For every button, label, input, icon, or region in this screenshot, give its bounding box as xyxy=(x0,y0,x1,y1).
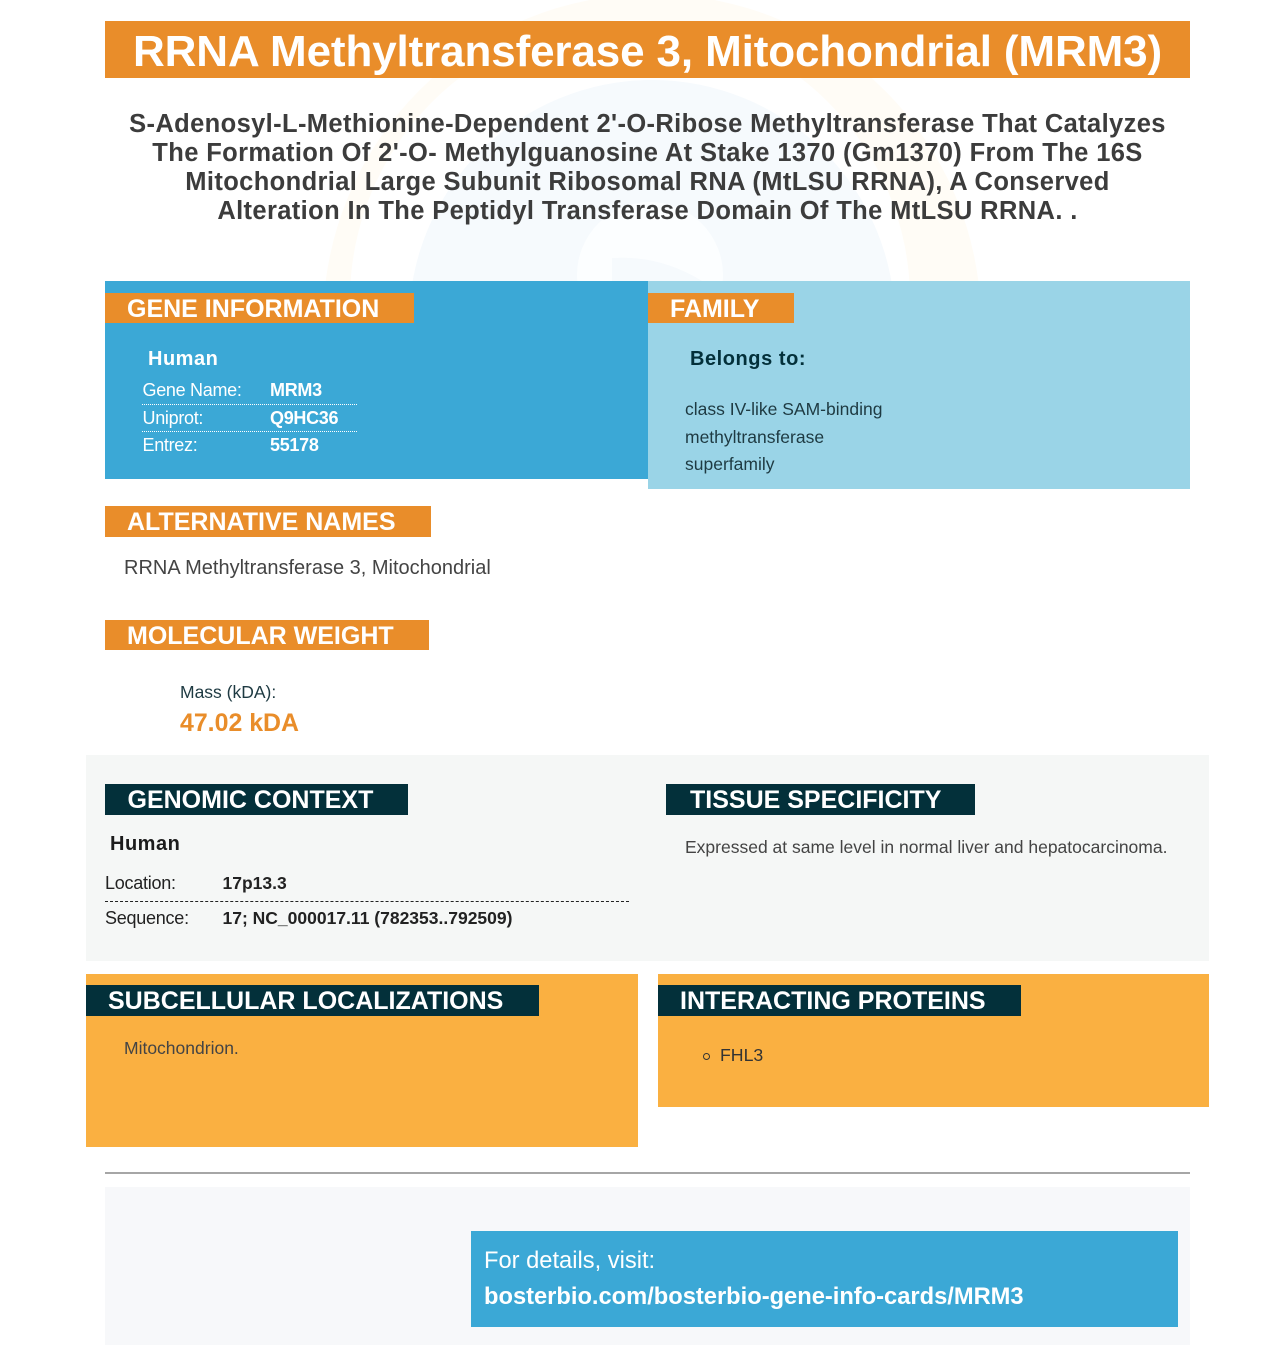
heading: interacting proteins: INTERACTING PROTEINS xyxy=(680,987,986,1015)
gene info table: MRM3 xyxy=(270,380,322,400)
species label: Human xyxy=(148,348,218,370)
title: RRNA Methyltransferase 3, Mitochondrial (MRM3) xyxy=(133,27,1162,76)
gene info table: Uniprot: xyxy=(142,408,203,428)
panel: family xyxy=(648,281,1190,489)
heading: genomic context: GENOMIC CONTEXT xyxy=(128,786,373,814)
subtitle description: The Formation Of 2'-O- Methylguanosine At Stake 1370 (Gm1370) From The 16S xyxy=(152,139,1143,167)
gene info table xyxy=(142,380,357,455)
species label: Human xyxy=(110,833,180,855)
protein name: FHL3 xyxy=(720,1045,763,1065)
callout label: For details, visit: xyxy=(484,1248,655,1274)
heading: tissue specificity: TISSUE SPECIFICITY xyxy=(690,786,941,814)
gene info table: Entrez: xyxy=(142,435,197,455)
family text xyxy=(685,399,882,474)
genomic table xyxy=(105,873,629,928)
localization text: Mitochondrion. xyxy=(124,1038,239,1058)
belongs to label: Belongs to: xyxy=(690,348,806,370)
gene info table: Q9HC36 xyxy=(270,408,338,428)
alternative names text: RRNA Methyltransferase 3, Mitochondrial xyxy=(124,557,491,579)
title banner xyxy=(105,21,1190,78)
callout: details link xyxy=(471,1231,1178,1327)
panel: genomic context and tissue specificity xyxy=(86,755,1209,961)
tissue specificity text: Expressed at same level in normal liver and hepatocarcinoma. xyxy=(685,837,1167,857)
heading: family: FAMILY xyxy=(670,295,759,323)
bullet marker xyxy=(703,1053,710,1060)
gene info table: 55178 xyxy=(270,435,319,455)
background watermark logo xyxy=(326,0,978,281)
mass block xyxy=(180,682,299,737)
family text: methyltransferase xyxy=(685,426,824,446)
genomic table: Location: xyxy=(105,873,176,893)
family text: superfamily xyxy=(685,454,774,474)
heading: gene information: GENE INFORMATION xyxy=(127,295,379,323)
panel: subcellular localizations xyxy=(86,974,638,1147)
genomic table: Sequence: xyxy=(105,908,189,928)
gene info table: Gene Name: xyxy=(142,380,242,400)
panel: gene information xyxy=(105,281,648,479)
heading: molecular weight: MOLECULAR WEIGHT xyxy=(127,622,394,650)
mass value: 47.02 kDA xyxy=(180,709,299,737)
heading: subcellular localizations: SUBCELLULAR LOCALIZATIONS xyxy=(108,987,503,1015)
callout url: bosterbio.com/bosterbio-gene-info-cards/MRM3 xyxy=(484,1284,1024,1310)
footer rule xyxy=(105,1172,1190,1174)
subtitle description: Alteration In The Peptidyl Transferase Domain Of The MtLSU RRNA. . xyxy=(217,197,1078,225)
subtitle description xyxy=(129,110,1166,225)
panel: interacting proteins xyxy=(658,974,1209,1107)
genomic table: 17; NC_000017.11 (782353..792509) xyxy=(222,908,512,928)
mass label: Mass (kDA): xyxy=(180,682,276,702)
subtitle description: Mitochondrial Large Subunit Ribosomal RNA (MtLSU RRNA), A Conserved xyxy=(185,168,1110,196)
subtitle description: S-Adenosyl-L-Methionine-Dependent 2'-O-Ribose Methyltransferase That Catalyzes xyxy=(129,110,1166,138)
panel: footer xyxy=(105,1187,1190,1345)
heading: alternative names: ALTERNATIVE NAMES xyxy=(127,508,396,536)
family text: class IV-like SAM-binding xyxy=(685,399,882,419)
heading: family xyxy=(648,293,794,323)
genomic table: 17p13.3 xyxy=(222,873,287,893)
